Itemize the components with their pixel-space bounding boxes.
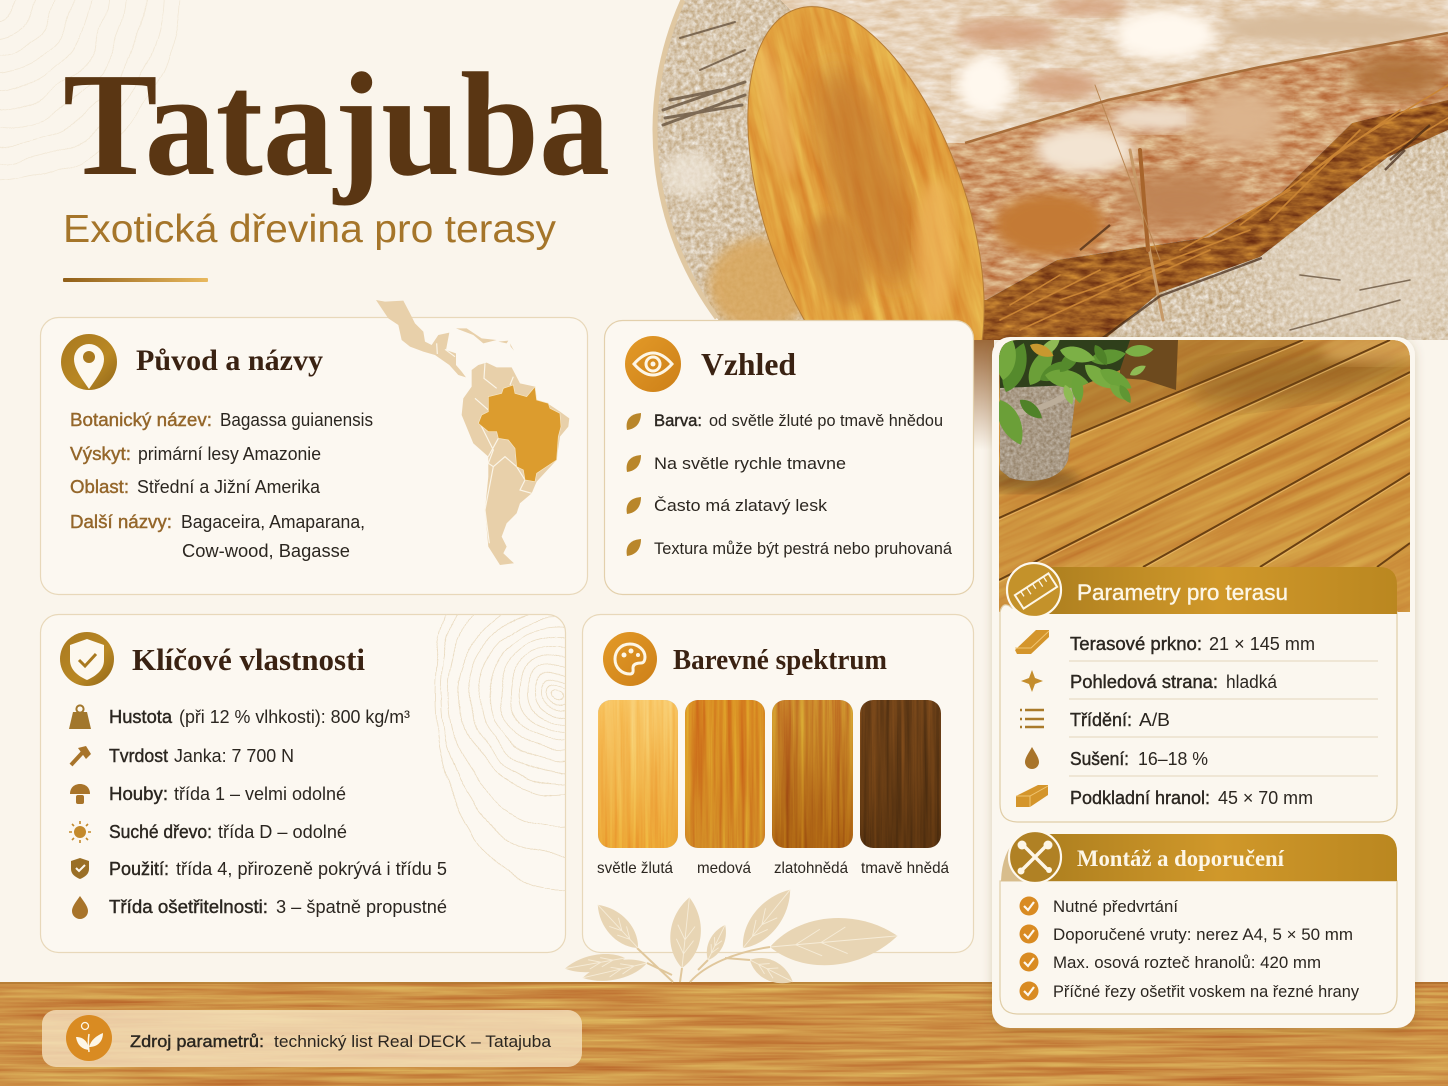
bark top — [780, 0, 1448, 150]
list: appearance: Na světle rychle tmavne — [654, 454, 846, 473]
potted plant — [991, 334, 1154, 481]
list: appearance — [627, 411, 953, 558]
hero rim — [655, 0, 717, 318]
row: podkladní hranol — [1016, 785, 1313, 808]
text block: names: Výskyt: — [70, 444, 131, 464]
row: použití: Použití: — [109, 859, 169, 879]
swatch: zlatohnědá: zlatohnědá — [774, 860, 848, 877]
text block: names: Botanický název: — [70, 410, 212, 430]
row: sušení: 16–18 % — [1138, 749, 1208, 769]
row: houby — [70, 784, 346, 804]
row: pohledová strana: hladká — [1226, 672, 1278, 692]
list: appearance: Textura může být pestrá nebo pruhovaná — [654, 539, 953, 558]
row: třídění — [1020, 710, 1170, 730]
source pill: technický list Real DECK – Tatajuba — [274, 1032, 552, 1051]
source pill — [42, 1010, 582, 1067]
banner — [1040, 567, 1397, 614]
row: terasové prkno: Terasové prkno: — [1070, 634, 1202, 654]
text block: names: Další názvy: — [70, 512, 172, 532]
icon: tools — [1009, 831, 1061, 883]
row: suché dřevo: třída D – odolné — [218, 822, 347, 842]
list: appearance: Často má zlatavý lesk — [654, 496, 828, 515]
source text: Zdroj parametrů: — [130, 1032, 264, 1051]
row: třída ošetřitelnosti — [72, 896, 447, 919]
panel: barevné spektrum — [582, 614, 974, 952]
panel: klíčové vlastnosti — [40, 614, 566, 954]
heading: Vzhled — [701, 346, 796, 382]
panel: montáž a doporučení — [1000, 831, 1397, 1014]
swatch: medová — [685, 700, 765, 877]
row: terasové prkno — [1015, 630, 1315, 654]
swatch: světle žlutá — [597, 700, 678, 877]
text block: names — [70, 410, 373, 561]
row: hustota: (při 12 % vlhkosti): 800 kg/m³ — [179, 707, 410, 727]
row: podkladní hranol: 45 × 70 mm — [1218, 788, 1313, 808]
photo: terrace deck — [999, 340, 1410, 612]
bark fade behind cards — [974, 340, 994, 450]
heading: Původ a názvy — [136, 344, 323, 377]
checklist — [1020, 896, 1359, 1001]
hero photo: tatajuba log — [658, 0, 1448, 340]
panel: původ a názvy — [40, 300, 588, 594]
row: pohledová strana: Pohledová strana: — [1070, 672, 1218, 692]
swatch: zlatohnědá — [772, 700, 853, 877]
icon: shield — [60, 632, 114, 686]
list: appearance: od světle žluté po tmavě hnědou — [709, 411, 943, 430]
log end grain — [747, 6, 984, 340]
checklist: Max. osová rozteč hranolů: 420 mm — [1053, 953, 1321, 972]
panel: parametry pro terasu — [1000, 563, 1397, 822]
text block: names: Bagassa guianensis — [220, 410, 373, 430]
banner — [1001, 834, 1397, 881]
row: sušení: Sušení: — [1070, 749, 1129, 769]
row: třídění: A/B — [1139, 710, 1170, 730]
row: použití — [71, 858, 447, 879]
panel: vzhled — [604, 320, 974, 594]
swatch: medová: medová — [697, 860, 751, 877]
subtitle: Exotická dřevina pro terasy — [63, 208, 557, 251]
footer wood band — [0, 982, 1448, 1086]
banner title: Montáž a doporučení — [1077, 846, 1285, 871]
row: použití: třída 4, přirozeně pokrývá i třídu 5 — [176, 859, 447, 879]
row: suché dřevo — [69, 821, 347, 843]
checklist: Příčné řezy ošetřit voskem na řezné hrany — [1053, 982, 1359, 1001]
bark middle — [900, 33, 1448, 300]
icon: palette — [603, 632, 657, 686]
row: pohledová strana — [1021, 670, 1278, 692]
row: suché dřevo: Suché dřevo: — [109, 822, 212, 842]
row: třída ošetřitelnosti: Třída ošetřitelnosti: — [109, 897, 268, 917]
row: třídění: Třídění: — [1070, 710, 1132, 730]
row dividers — [1069, 661, 1378, 776]
swatch: tmavě hnědá: tmavě hnědá — [861, 860, 949, 877]
icon: location pin — [61, 334, 117, 390]
row: houby: Houby: — [109, 784, 168, 804]
row: terasové prkno: 21 × 145 mm — [1209, 634, 1315, 654]
heading: Barevné spektrum — [673, 644, 887, 676]
heading: Klíčové vlastnosti — [132, 642, 365, 677]
row: tvrdost: Janka: 7 700 N — [174, 746, 294, 766]
map: Latin America — [376, 300, 569, 565]
row: sušení — [1025, 747, 1208, 769]
checklist: Nutné předvrtání — [1053, 897, 1178, 916]
row: tvrdost: Tvrdost — [109, 746, 168, 766]
banner title: Parametry pro terasu — [1077, 580, 1288, 605]
text block: names: Oblast: — [70, 477, 129, 497]
checklist: Doporučené vruty: nerez A4, 5 × 50 mm — [1053, 925, 1353, 944]
text block: names: primární lesy Amazonie — [138, 444, 321, 464]
swatch: světle žlutá: světle žlutá — [597, 860, 673, 877]
row: houby: třída 1 – velmi odolné — [174, 784, 346, 804]
text block: names: Bagaceira, Amaparana, — [181, 512, 365, 532]
row: hustota — [69, 705, 410, 729]
row: tvrdost — [71, 746, 294, 766]
decorative tree rings — [434, 615, 565, 892]
text block: names: Střední a Jižní Amerika — [137, 477, 321, 497]
Brazil highlight — [478, 385, 561, 482]
row: podkladní hranol: Podkladní hranol: — [1070, 788, 1210, 808]
title: Tatajuba — [63, 43, 610, 207]
right column card — [988, 334, 1420, 1032]
bark bottom fibers — [982, 100, 1448, 340]
icon: eye — [625, 336, 681, 392]
swatch: tmavě hnědá — [860, 700, 949, 877]
row: třída ošetřitelnosti: 3 – špatně propustné — [276, 897, 447, 917]
title rule — [63, 278, 208, 282]
text block: names: Cow-wood, Bagasse — [182, 541, 350, 561]
row: hustota: Hustota — [109, 707, 173, 727]
list: appearance: Barva: — [654, 411, 702, 430]
decorative leaf branch — [564, 881, 900, 991]
icon: sprout — [66, 1015, 112, 1061]
icon: ruler — [1007, 563, 1061, 617]
decorative wood rings top left — [0, 0, 182, 182]
